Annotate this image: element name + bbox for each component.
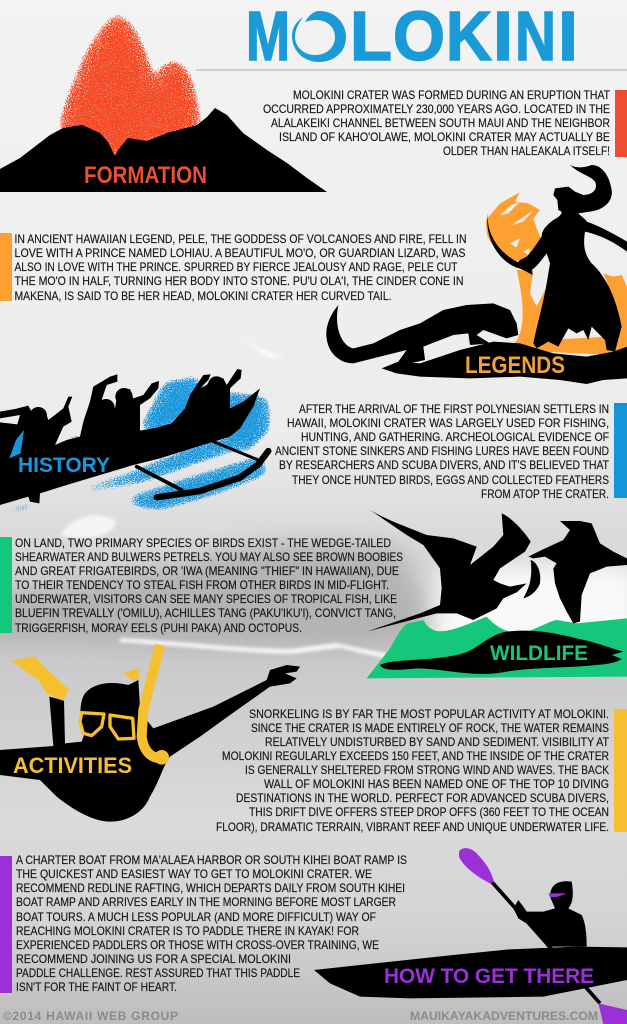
text: wildlife: BLUEFIN TREVALLY ('OMILU), ACHILLES TANG (PAKU'IKU'I), CONVICT TANG, xyxy=(15,607,396,620)
text: how to get there: EXPERIENCED PADDLERS OR THOSE WITH CROSS-OVER TRAINING, WE xyxy=(16,939,379,952)
panel: how to get there xyxy=(0,848,627,1024)
icon: sword xyxy=(487,212,522,268)
icon: fish xyxy=(523,560,540,598)
text: wildlife: UNDERWATER, VISITORS CAN SEE MANY SPECIES OF TROPICAL FISH, LIKE xyxy=(15,593,397,606)
icon: kayaker body xyxy=(513,881,587,947)
text: legends: MAKENA, IS SAID TO BE HER HEAD, MOLOKINI CRATER HER CURVED TAIL. xyxy=(14,290,392,303)
text: how to get there: RECOMMEND REDLINE RAFTING, WHICH DEPARTS DAILY FROM SOUTH KIHEI xyxy=(16,882,405,895)
text: how to get there: A CHARTER BOAT FROM MA'ALAEA HARBOR OR SOUTH KIHEI BOAT RAMP IS xyxy=(16,854,407,867)
heading: how to get there: HOW TO GET THERE xyxy=(384,965,594,988)
icon: snorkel xyxy=(142,645,169,765)
icon: volcano xyxy=(0,108,327,192)
icon: mask xyxy=(80,713,134,739)
bar: legends xyxy=(0,233,12,301)
text: how to get there: THE QUICKEST AND EASIEST WAY TO GET TO MOLOKINI CRATER. WE xyxy=(16,868,372,881)
icon: diver body xyxy=(0,665,300,822)
illustration: birds and eel xyxy=(367,510,627,678)
illustration: snorkeler xyxy=(0,645,300,822)
icon: second bird xyxy=(528,521,627,623)
text: wildlife: TO THEIR TENDENCY TO STEAL FISH FROM OTHER BIRDS IN MID-FLIGHT. xyxy=(15,579,389,592)
icon: kayaker mask xyxy=(548,893,567,897)
icon: gaps between paddlers xyxy=(0,415,20,424)
text: how to get there: BOAT TOURS. A MUCH LESS POPULAR (AND MORE DIFFICULT) WAY OF xyxy=(16,911,376,924)
icon: paddle xyxy=(459,848,627,1024)
footer: copyright: ©2014 HAWAII WEB GROUP xyxy=(3,1009,178,1023)
bar: activities xyxy=(614,709,627,832)
text: how to get there: PADDLE CHALLENGE. REST ASSURED THAT THIS PADDLE xyxy=(16,967,300,980)
icon: fire xyxy=(486,192,627,355)
text: how to get there: REACHING MOLOKINI CRATER IS TO PADDLE THERE IN KAYAK! FOR xyxy=(16,925,359,938)
icon: hull and paddlers xyxy=(0,369,260,505)
text: legends: ALSO IN LOVE WITH THE PRINCE. SPURRED BY FIERCE JEALOUSY AND RAGE, PELE CUT xyxy=(14,261,458,274)
text: wildlife xyxy=(15,537,403,635)
panel: activities xyxy=(0,645,627,834)
panel: formation xyxy=(0,18,627,192)
panel: legends xyxy=(0,163,627,384)
text: activities xyxy=(216,708,609,834)
illustration: kayaker xyxy=(314,848,627,1024)
footer: website: MAUIKAYAKADVENTURES.COM xyxy=(410,1009,598,1023)
bar: how to get there xyxy=(0,856,12,993)
heading: formation: FORMATION xyxy=(84,162,207,189)
bar: formation xyxy=(615,90,627,157)
icon: moray eel xyxy=(380,631,623,674)
illustration: pele and lizard xyxy=(326,163,627,384)
heading: legends: LEGENDS xyxy=(465,352,565,379)
heading: activities: ACTIVITIES xyxy=(13,753,132,778)
icon: kayak xyxy=(314,947,627,998)
text: legends: IN ANCIENT HAWAIIAN LEGEND, PELE, THE GODDESS OF VOLCANOES AND FIRE, FELL IN xyxy=(14,233,466,246)
icon: green wave xyxy=(367,617,627,678)
icon: paddler heads xyxy=(30,376,225,424)
text: wildlife: AND GREAT FRIGATEBIRDS, OR 'IWA (MEANING "THIEF" IN HAWAIIAN), DUE xyxy=(15,565,399,578)
icon: blue spray xyxy=(0,380,267,512)
text: legends: THE MO'O IN HALF, TURNING HER BODY INTO STONE. PU'U OLA'I, THE CINDER CONE IN xyxy=(14,275,464,288)
text: how to get there: RECOMMEND JOINING US FOR A SPECIAL MOLOKINI xyxy=(16,953,291,966)
text: wildlife: SHEARWATER AND BULWERS PETRELS. YOU MAY ALSO SEE BROWN BOOBIES xyxy=(15,551,403,564)
text: wildlife: ON LAND, TWO PRIMARY SPECIES OF BIRDS EXIST - THE WEDGE-TAILED xyxy=(15,537,391,550)
heading: history: HISTORY xyxy=(18,454,110,477)
icon: ground xyxy=(382,342,627,384)
text: how to get there: BOAT RAMP AND ARRIVES EARLY IN THE MORNING BEFORE MOST LARGER xyxy=(16,896,396,909)
icon: lizard xyxy=(326,303,518,363)
text: formation xyxy=(263,89,610,158)
text: wildlife: TRIGGERFISH, MORAY EELS (PUHI PAKA) AND OCTOPUS. xyxy=(15,622,302,635)
text: history xyxy=(275,403,609,501)
text: history: FROM ATOP THE CRATER. xyxy=(481,488,609,501)
heading: wildlife: WILDLIFE xyxy=(490,642,588,665)
icon: fins xyxy=(12,657,140,701)
bar: wildlife xyxy=(0,537,12,633)
bar: history xyxy=(614,403,627,498)
text: how to get there: ISN'T FOR THE FAINT OF HEART. xyxy=(16,981,177,994)
panel: history xyxy=(0,369,627,512)
title swirl O xyxy=(292,11,346,62)
text: how to get there xyxy=(16,854,407,994)
icon: outrigger xyxy=(137,442,268,497)
text: legends: LOVE WITH A PRINCE NAMED LOHIAU. A BEAUTIFUL MO'O, OR GUARDIAN LIZARD, WAS xyxy=(14,247,466,260)
illustration: canoe xyxy=(0,369,268,512)
title xyxy=(246,0,578,75)
icon: lava eruption xyxy=(64,18,196,160)
icon: pele xyxy=(515,163,627,352)
text: legends xyxy=(14,233,466,303)
icon: frigatebird xyxy=(367,510,531,632)
panel: wildlife xyxy=(0,510,627,678)
